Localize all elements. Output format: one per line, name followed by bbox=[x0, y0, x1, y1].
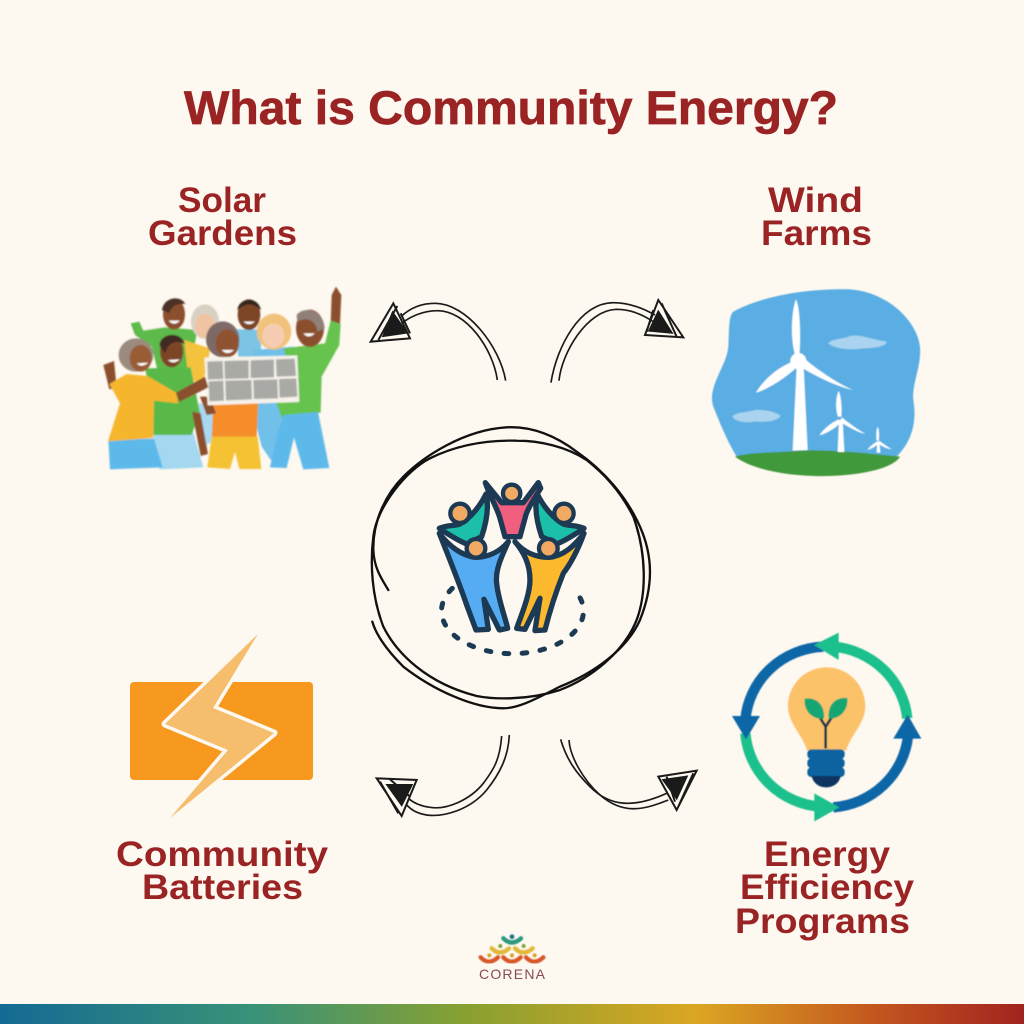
heads bbox=[450, 485, 574, 558]
logo wordmark: CORENA bbox=[479, 966, 546, 982]
solar panel bbox=[204, 355, 299, 405]
arrow: to community batteries bbox=[377, 735, 509, 816]
dashed ground ellipse bbox=[441, 588, 583, 654]
person with raised arm bbox=[270, 287, 341, 469]
label: Wind Farms: Wind bbox=[768, 181, 863, 220]
back row person with white hair bbox=[184, 304, 219, 387]
icon: light bulb with plant and cycle arrows bbox=[732, 633, 921, 821]
cycle ring bbox=[745, 647, 908, 807]
teal figure left bbox=[439, 494, 487, 544]
teal figure right bbox=[536, 494, 584, 544]
yellow figure bbox=[515, 533, 584, 631]
arrow: to solar gardens bbox=[371, 303, 506, 381]
label: Energy Efficiency Programs: Efficiency bbox=[740, 868, 915, 907]
sky blob bbox=[712, 289, 920, 472]
bolt outline inside battery bbox=[162, 682, 278, 780]
rainbow gradient footer bar bbox=[0, 1004, 1024, 1024]
left person bbox=[103, 338, 208, 469]
centre person bbox=[200, 321, 261, 469]
illustration: people holding a solar panel bbox=[103, 287, 341, 469]
community people icon bbox=[439, 483, 584, 631]
label: Community Batteries: Batteries bbox=[142, 868, 303, 907]
label: Energy Efficiency Programs: Energy bbox=[764, 835, 891, 874]
label: Energy Efficiency Programs: Programs bbox=[735, 902, 910, 941]
mid-row person bbox=[145, 335, 208, 469]
cycle arrowheads bbox=[732, 633, 921, 821]
middle turbine bbox=[819, 391, 866, 452]
label: Energy Efficiency Programs bbox=[735, 835, 915, 941]
back row person with blue shirt bbox=[235, 299, 262, 357]
scribbled circle bbox=[372, 427, 650, 708]
bulb base bbox=[807, 749, 845, 787]
clouds bbox=[732, 335, 887, 422]
plant bbox=[805, 698, 847, 748]
large turbine bbox=[756, 299, 853, 451]
lightning bolt bbox=[165, 634, 274, 818]
back row person with green shirt bbox=[131, 298, 197, 373]
label: Solar Gardens: Solar bbox=[178, 181, 266, 220]
pale backdrop between shirts bbox=[198, 403, 217, 447]
battery body bbox=[130, 682, 313, 780]
label: Community Batteries: Community bbox=[116, 835, 329, 874]
logo: CORENA bbox=[479, 934, 546, 982]
central circle with community icon bbox=[372, 427, 650, 708]
blonde person bbox=[253, 314, 293, 463]
small turbine bbox=[867, 427, 892, 453]
label: Solar Gardens: Gardens bbox=[148, 214, 297, 253]
bulb bbox=[788, 667, 865, 751]
pink figure bbox=[485, 483, 541, 537]
ground bbox=[735, 450, 900, 476]
arrow: to wind farms bbox=[551, 300, 683, 383]
arrow: to energy efficiency programs bbox=[561, 739, 697, 810]
label: Wind Farms: Farms bbox=[761, 214, 872, 253]
label: Community Batteries bbox=[116, 835, 329, 907]
label: Solar Gardens bbox=[148, 181, 297, 253]
logo mark bbox=[481, 934, 543, 962]
illustration: wind farm bbox=[712, 289, 920, 476]
label: Wind Farms bbox=[761, 181, 872, 253]
blue figure bbox=[439, 533, 508, 630]
illustration: community battery with lightning bolt bbox=[130, 634, 313, 818]
title: What is Community Energy? bbox=[184, 81, 838, 134]
